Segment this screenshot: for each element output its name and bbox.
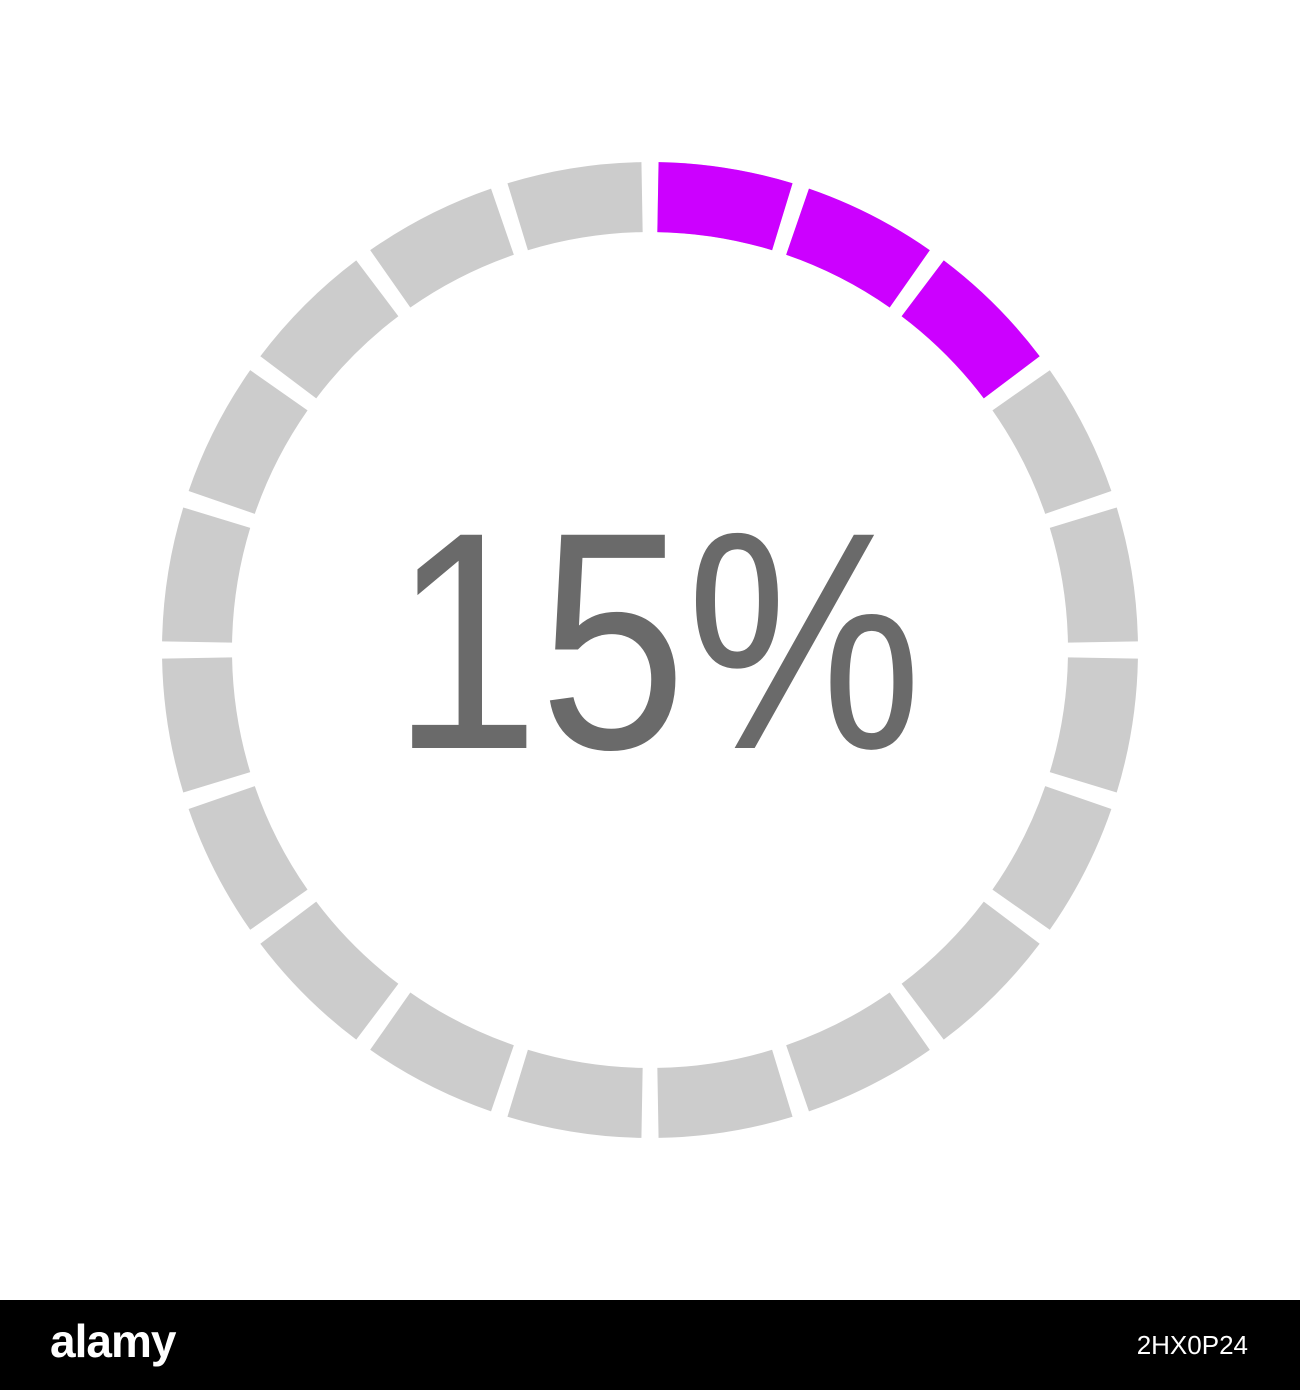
footer logo: alamy xyxy=(50,1315,175,1367)
footer image id: 2HX0P24 xyxy=(1137,1330,1248,1360)
ring: grey segments xyxy=(197,197,1103,1103)
footer bar xyxy=(0,1300,1300,1390)
ring: purple progress segments xyxy=(197,197,1103,1103)
percentage label: 15% xyxy=(392,467,922,814)
